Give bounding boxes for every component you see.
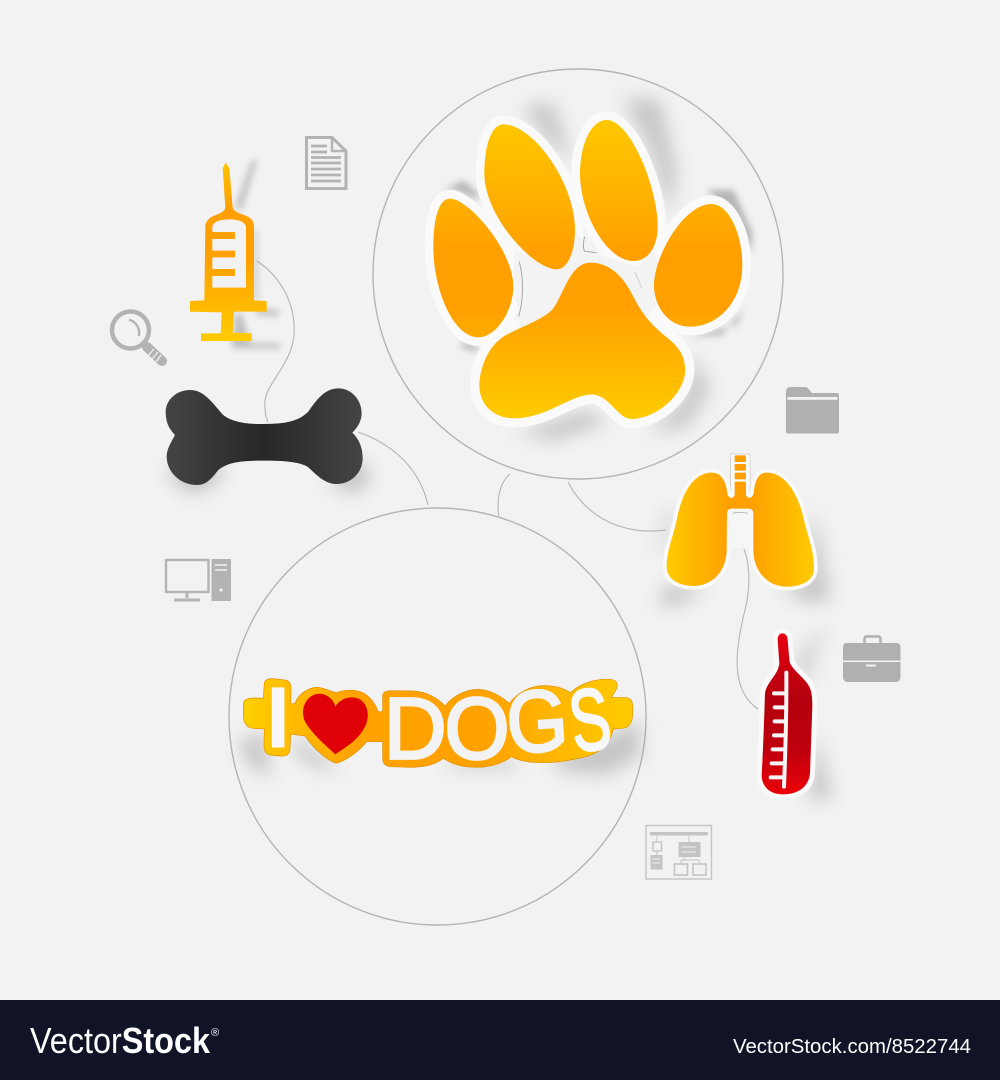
letter I: I — [266, 668, 290, 766]
circle: bottom — [229, 508, 646, 925]
footer image id: VectorStock.com/8522744 — [733, 1036, 971, 1058]
icon: lungs sticker — [660, 454, 830, 607]
footer logo: ® — [211, 1027, 219, 1039]
connector lines — [257, 261, 758, 709]
footer bar — [0, 1000, 1000, 1080]
letter G: G — [503, 670, 571, 772]
icon: briefcase — [843, 636, 900, 682]
icon: folder — [786, 387, 839, 434]
circle: top — [373, 69, 783, 479]
sticker: I love DOGS — [240, 668, 640, 778]
icon: thermometer sticker — [762, 630, 832, 802]
icon: flowchart — [646, 826, 712, 879]
icon: document — [306, 137, 346, 188]
letter S: S — [563, 668, 617, 771]
letter D: D — [384, 680, 447, 778]
letter O: O — [444, 681, 510, 778]
icon: computer — [166, 559, 231, 601]
icon: syringe sticker — [190, 160, 280, 348]
icon: heart — [303, 694, 368, 754]
icon: paw sticker — [433, 98, 753, 440]
icon: magnifier — [112, 312, 162, 362]
icon: bone sticker — [166, 388, 370, 492]
footer logo: VectorStock — [30, 1020, 211, 1061]
